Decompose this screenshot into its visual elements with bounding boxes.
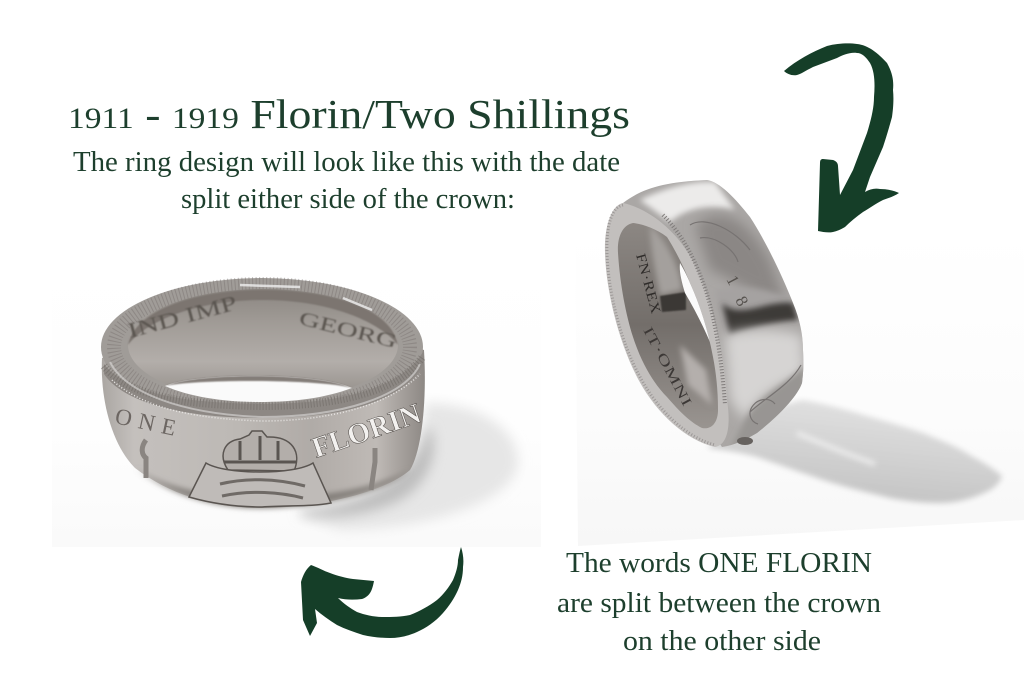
left ring body [102, 300, 425, 508]
left ring lettering: ONE [113, 403, 185, 442]
right ring face [605, 203, 729, 447]
intro text [73, 146, 620, 215]
right ring engraved details: 1 [722, 272, 743, 288]
right ring interior [618, 223, 718, 428]
left ring lettering: GEORG [297, 308, 399, 353]
caption: are split between the crown [557, 587, 882, 619]
right ring foot [737, 437, 753, 445]
intro text: split either side of the crown: [181, 183, 515, 215]
caption: The words ONE FLORIN [566, 547, 872, 579]
right ring inner lettering: FN·REX [632, 252, 663, 316]
left ring interior [128, 289, 398, 401]
left ring lettering: IND IMP [125, 291, 239, 343]
right ring shadow [707, 400, 1002, 503]
arrow: pointing down to right ring [784, 43, 899, 232]
right ring hole [680, 263, 710, 342]
left ring front lip [104, 352, 424, 418]
caption: on the other side [623, 625, 821, 657]
photo: left ring [52, 240, 541, 547]
left ring lettering: FLORIN [308, 398, 425, 465]
caption [557, 547, 882, 657]
left ring shadow [300, 403, 518, 530]
left ring hole [165, 376, 352, 402]
left ring lettering [113, 291, 425, 465]
left ring crown emblem [142, 431, 375, 507]
left ring rim [101, 278, 423, 416]
arrow: pointing left to left ring [301, 547, 463, 638]
right ring engraved details [690, 222, 801, 424]
intro text: The ring design will look like this with the date [73, 146, 620, 178]
photo: right ring: IT·OMNI [639, 325, 694, 410]
title: 1911 - 1919 Florin/Two Shillings [68, 91, 630, 137]
right ring engraved details: 8 [731, 293, 752, 309]
right ring band [623, 180, 804, 447]
photo: right ring [604, 180, 1006, 508]
